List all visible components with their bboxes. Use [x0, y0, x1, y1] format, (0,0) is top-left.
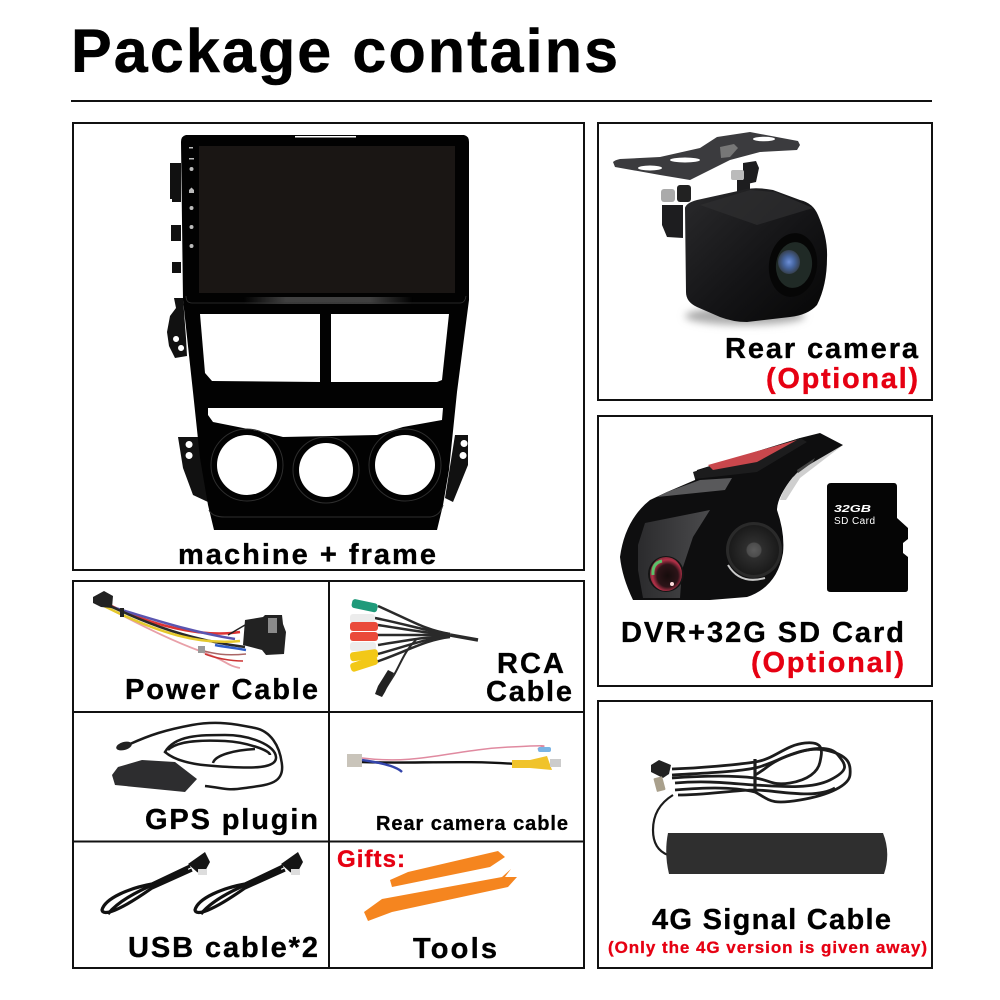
- optional note: (Optional): [766, 363, 918, 395]
- icon: RCA cable: [349, 599, 478, 697]
- screen sheen: [243, 297, 413, 304]
- cell: power cable: [93, 591, 318, 706]
- gifts note: Gifts:: [337, 846, 405, 873]
- head unit with frame: [167, 135, 469, 530]
- icon: 4G antenna: [651, 743, 887, 874]
- bracket plate: [613, 132, 800, 180]
- side brackets: [167, 163, 468, 502]
- side buttons: [189, 147, 194, 248]
- icon: SD card: [827, 483, 908, 592]
- dvr body: [620, 433, 843, 600]
- cable coil: [653, 743, 850, 855]
- accessories grid frame: [73, 581, 584, 968]
- panel: DVR and SD card: [598, 416, 932, 686]
- plug right: [243, 615, 286, 655]
- screen: [199, 146, 455, 293]
- silver strip: [780, 445, 843, 500]
- cell: rear camera cable: [347, 746, 568, 835]
- label: Rear camera cable: [376, 813, 568, 835]
- label: Rear camera: [725, 333, 919, 365]
- note: (Only the 4G version is given away): [608, 938, 927, 957]
- title: Package contains: [71, 17, 618, 85]
- icon: GPS antenna: [112, 723, 282, 792]
- icon: rear camera: [613, 132, 827, 325]
- lens: [648, 556, 684, 592]
- antenna body: [666, 833, 887, 874]
- panel: rear camera: [598, 123, 932, 400]
- icon: DVR: [620, 433, 843, 600]
- label: Tools: [413, 933, 497, 965]
- cell: RCA cable: [349, 599, 572, 708]
- icon: trim tools: [364, 851, 517, 921]
- icon: USB cable 2: [195, 852, 303, 914]
- adhesive: [708, 440, 797, 470]
- cutouts: [200, 314, 449, 497]
- camera body: [685, 188, 827, 322]
- panel: 4G signal cable: [598, 701, 932, 968]
- label: USB cable*2: [128, 932, 318, 964]
- icon: SD card: SD Card: [834, 516, 875, 527]
- panel: machine + frame: [73, 123, 584, 571]
- top highlight: [295, 136, 356, 138]
- top face: [657, 478, 732, 497]
- lens: [765, 230, 821, 300]
- knob rings: [209, 429, 443, 517]
- front housing: [638, 510, 710, 598]
- connector: [651, 760, 671, 778]
- label: DVR+32G SD Card: [621, 617, 904, 649]
- plug left: [93, 591, 113, 608]
- speaker: [726, 522, 782, 578]
- icon: rear camera cable: [347, 746, 561, 772]
- label: machine + frame: [178, 539, 436, 571]
- shadow: [685, 307, 805, 325]
- label: 4G Signal Cable: [652, 904, 891, 936]
- label: Power Cable: [125, 674, 318, 706]
- label: GPS plugin: [145, 804, 318, 836]
- mount pad: [693, 438, 807, 479]
- bolts and arm: [662, 161, 759, 238]
- label: RCA: [497, 648, 564, 680]
- screen bezel line: [186, 296, 466, 303]
- frame body: [181, 135, 469, 530]
- cell: tools: [337, 846, 517, 965]
- icon: SD card: 32GB: [834, 504, 871, 515]
- camera top face: [700, 190, 813, 225]
- cell: GPS plugin: [112, 723, 318, 836]
- optional note: (Optional): [751, 647, 904, 679]
- cell: USB cable: [102, 852, 318, 964]
- icon: USB cable 1: [102, 852, 210, 914]
- icon: power cable: [93, 591, 286, 668]
- title rule: [71, 100, 932, 102]
- label line 2: Cable: [486, 676, 572, 708]
